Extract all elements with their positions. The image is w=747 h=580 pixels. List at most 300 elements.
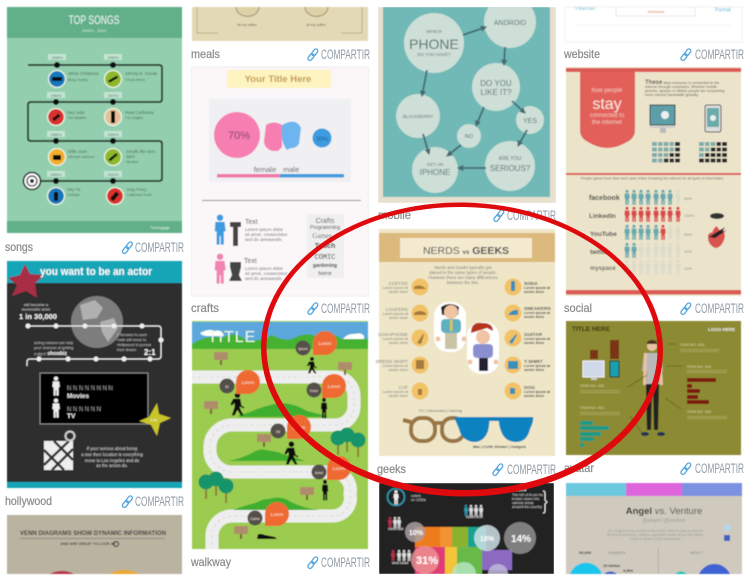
word cloud: Games [312,232,332,240]
bubble labels: 10% [409,530,424,537]
share: hollywood [122,494,184,509]
caption: People spend more time each year online browsing the internet for all types of information [581,176,723,180]
panel: female and male: male [283,165,299,174]
hills [228,403,327,510]
callout text: Lorem [319,341,332,346]
stat: 1 in 30,000: will become a [24,302,49,307]
share: crafts [307,301,370,316]
share: mobile [493,208,556,223]
card: website: Y-BarGain [575,6,596,11]
figures [230,357,328,539]
person ring [388,488,404,506]
card: meals: sit my coffee [306,23,326,27]
bubbles [570,548,730,574]
brown glasses [403,418,464,441]
flow text: PHONE [409,36,459,52]
detail lines [580,349,727,419]
pink figure row [215,253,288,284]
intro text [645,80,725,97]
card: venn diagrams [7,515,182,574]
empty pictograms [624,190,681,275]
ribbon [580,72,635,148]
card: crafts [192,67,368,296]
card: top songs: *Venngage [150,225,171,230]
yellow star: Los [151,417,157,422]
year tags: 1940's [51,56,63,60]
song titles: Chuck Berry [125,78,145,82]
card: angel vs venture: @angel | @venture [642,518,686,524]
left labels: COFFEE [389,281,408,287]
brand names [589,195,620,272]
ribbon: stay [592,96,622,113]
year tags: 2000's [50,173,62,177]
card: meals: sit my coffee [237,23,257,27]
region labels: west coast [391,561,409,565]
share: songs [122,240,184,255]
label: mobile: mobile [378,208,411,222]
title: top songs: TOP SONGS [68,13,120,27]
left labels: Lorem ipsum at [383,364,408,368]
card: venn diagrams: AND ARE GREAT TO LOOK AT [60,542,116,546]
card: dark map infographic [379,483,554,574]
intro text: These days everyone is connected to the [645,80,719,86]
flow text: ANDROID [494,20,526,27]
text: acting classes: a gig in showbiz [34,351,68,357]
callout text: Amet [315,471,323,475]
pink figure row: sit amet, consectetur [245,271,288,276]
people icons [388,505,483,561]
dotted connector [26,324,164,366]
brand names: twitter [590,249,610,256]
intro text [428,265,498,285]
song titles: The Beatles [67,116,86,120]
flow text [403,20,537,177]
state text: states [512,487,527,493]
card: mobile flowchart [378,0,556,203]
glasses captions: Mac | Coffe Drinker | Gadgets [473,445,526,449]
flow text: NO [465,134,474,140]
flow text: SERIOUS? [490,164,531,173]
left labels: sector dolor [389,290,409,294]
pink figure row: Text [244,258,257,265]
percentages: 80% [684,196,692,201]
left labels: Lorem ipsum at [383,337,408,341]
stacked bars [590,340,619,359]
year tags: 1960's [50,94,62,98]
stat: 2:1: 2 females to each [117,333,147,337]
nerd character [434,302,466,352]
bubble labels: 18% [480,536,495,543]
glasses captions [419,409,526,449]
right labels: T-SHIRT [524,359,543,365]
card: social [566,67,741,296]
song titles: Hey Jude [67,110,85,115]
year tags [47,54,122,177]
flow text: ARE YOU [499,156,522,162]
label: meals: meals [191,47,220,61]
word cloud: Programming [310,225,340,231]
callouts: orange [236,331,351,526]
right labels: SODA [524,281,538,287]
callout text: Et [225,385,229,389]
song icon glyphs [52,76,119,201]
song titles: Bing Crosby [68,78,88,82]
text: location [81,446,143,468]
text: location: move to Los Angeles and do [85,458,140,463]
left labels: SAXAPHONE [378,332,408,338]
card: meals [192,7,368,41]
black box: movies and tv: Movies [67,393,89,400]
label: avatar: avatar [564,461,594,475]
teal bar chart [580,421,609,447]
panel: female and male: 30% [316,137,329,143]
stat values: 4,000 [623,568,634,573]
label: crafts: crafts [191,301,219,315]
song titles: Johnny B. Goode [125,71,158,76]
right labels: SNEAKERS [524,306,551,312]
intro text: between the two. [447,280,479,285]
card: hollywood [7,261,182,488]
sky [192,322,368,346]
geek character [467,322,499,374]
text: location: a star then location is everything [81,452,143,457]
clouds [200,330,364,339]
region labels [388,515,484,565]
map icon [44,432,74,470]
card: website [565,6,742,42]
map blocks [415,527,512,574]
word cloud: Touch [315,243,335,250]
share: songs: COMPARTIR [135,240,184,255]
phone [705,105,721,132]
song titles: Smells like teen [126,149,156,154]
bubbles [405,522,536,574]
bubble labels [409,530,531,567]
label: social: social [564,301,592,315]
right labels: Lorem ipsum at [524,364,551,368]
item labels: ITEM NO. 003 [680,343,704,347]
intro text: phones, laptops or tablets people are consuming [645,89,725,93]
callout text: Lorem [271,512,284,517]
state text: various areas [512,501,534,505]
right labels: sector dolor [524,341,545,345]
stat values [579,550,634,573]
left labels: Lorem ipsum at [383,286,408,290]
blue figure row: Lorem ipsum dolor [245,227,284,232]
song icons [48,70,124,204]
song titles: White Christmas [68,71,99,76]
card: website: Disclosed [648,10,664,14]
title text: TITLE [208,329,256,346]
state text: around the country [512,505,542,509]
blue figure row [215,214,288,246]
share: walkway [307,555,370,570]
left labels: sector dolor [389,368,409,372]
song titles: Nirvana [126,160,138,164]
pictogram bars [624,190,673,258]
flow text: BLACKBERRY [403,114,433,119]
callout text: Lorem [328,384,341,389]
blue figure row: sed do amusando. [245,237,283,242]
item labels: ITEM NO. 002 [580,384,604,388]
right labels: sector dolor [524,290,545,294]
person figure [641,340,665,436]
blue figure row: sit amet, consectetur [245,232,288,237]
card: top songs: 1940's - 2010 [82,28,107,33]
flow text: IPHONE [420,168,450,177]
right labels: Lorem ipsum at [524,311,551,315]
song titles: spirit [126,154,136,159]
dot grids [652,142,727,163]
intro text [607,529,703,541]
red highlight ellipse [258,199,666,500]
label: geeks: geeks [377,462,406,476]
left labels [376,281,409,398]
item labels [580,343,711,414]
state text: The US of A can be [512,493,543,497]
panel: female and male: 70% [228,130,250,142]
timeline nodes [53,62,116,184]
stat: 2:1: 2:1 [144,348,156,357]
text: acting classes: your chances of getting [34,346,73,350]
flow text: WHICH [426,29,442,34]
callout text: Lorem [242,380,255,385]
share: meals [307,47,370,62]
device icons [583,361,619,380]
panel: female and male: female [254,165,276,174]
bubble labels: 14% [511,534,531,545]
bubble labels: 31% [416,555,438,567]
stat values: 50,000 [579,550,592,555]
card: nerds vs geeks [376,229,555,456]
heading: actor: you want to be an actor [40,266,153,278]
stat: 2:1: Hollywood to pursue [117,343,151,347]
title: LOGO HERE [708,327,735,332]
ribbon: the internet [592,120,622,126]
text: acting classes: acting classes can help [34,341,73,345]
stat: 1 in 30,000 [19,302,57,321]
percentages: 100% [684,213,695,218]
ribbon: connected to [590,113,625,119]
right labels: GUITAR [524,332,543,338]
right labels: DOG [524,385,535,391]
left labels: Lorem ipsum at [383,390,408,394]
right labels: sector dolor [524,368,545,372]
state text: voters [411,494,421,498]
right labels [524,281,551,398]
stat: 1 in 30,000: successful actor [22,306,51,312]
black box: movies and tv: NNNNNN [67,407,103,413]
word cloud: horror [318,271,332,277]
card: walkway [192,321,368,549]
flow text: YES [523,118,537,125]
left labels: CAT [399,385,408,391]
year tags: 1950's [107,56,119,60]
pink figure row: Lorem ipsum dolor [245,266,284,271]
stat: 2:1: male will move to [117,338,146,342]
text: acting classes [34,341,73,357]
title: TITLE HERE [572,326,611,333]
flow arrows [422,27,527,168]
icon glyphs [414,281,518,395]
header band: NERDS vs GEEKS [423,245,509,257]
right labels: sector dolor [524,394,545,398]
label: songs: songs [5,240,33,254]
word cloud: gardening [313,263,337,269]
state text: broken down into [512,497,539,501]
right labels: Lorem ipsum at [524,390,551,394]
percentages [684,196,695,271]
card: top songs [7,7,182,233]
right labels: Lorem ipsum at [524,286,551,290]
brand names: facebook [589,195,620,202]
callout text: Lorem [293,425,306,430]
song titles: California Gurls [127,193,152,197]
intro text: more internet bandwidth globally. [645,93,699,97]
share: crafts: COMPARTIR [321,301,370,316]
title: angel vs venture: Angel vs. Venture [626,506,702,517]
stat labels: IMPACT [690,551,704,555]
intro text: a year in about 3,500 businesses [629,537,681,541]
left labels: Lorem ipsum at [383,312,408,316]
callout text: Sit [276,430,280,434]
title [572,326,735,333]
stat: 2:1: their dream [117,348,136,352]
song titles: Outkast [67,193,79,197]
year tags: 1980's [50,133,62,137]
intro text: internet through computers. Whether mobile [645,85,717,89]
song titles: Hey Ya [67,187,81,192]
brand names: YouTube [590,231,617,238]
song titles [67,71,158,197]
brand names: LinkedIn [589,213,616,220]
song titles: Billie Jean [68,149,88,154]
signposts [204,352,352,539]
flow text: GET AN [427,162,443,167]
ribbon: how people [592,88,623,94]
year tags: 1970's [107,94,119,98]
right labels: sector dolor [524,315,545,319]
icon circles [412,278,522,400]
header band [379,233,555,262]
intro text: placed in the same types of people. [429,270,497,275]
share: mobile: COMPARTIR [507,208,556,223]
stat labels: NUMBERS [608,551,626,555]
region labels: north east [388,527,404,531]
item labels: ITEM NO. 005 [687,410,711,414]
callouts: grey [220,340,326,526]
red pictograms [624,207,681,240]
brand names: myspace [590,266,616,272]
left labels: DRESS SHIRT [376,359,408,365]
road [192,377,354,549]
timeline path [28,65,162,181]
trees [198,428,366,503]
share: geeks [492,462,556,477]
callout text: Dolor [310,389,319,393]
text: location: as the actors do. [96,463,128,468]
state text: on 1930s [411,498,426,502]
share: hollywood: COMPARTIR [135,494,184,509]
fire icon [708,213,727,248]
left labels: sector dolor [389,316,409,320]
stat: 1 in 30,000: 1 in 30,000 [19,312,57,321]
song titles: Michael Jackson [68,155,95,159]
left labels: sector dolor [389,341,409,345]
stat values: 20 billion [603,563,621,568]
share: walkway: COMPARTIR [321,555,370,570]
yellow star [139,403,171,436]
callout text: Lorem [333,466,346,471]
item labels: ITEM NO. 001 [580,406,604,410]
flow text: DO YOU HAVE? [417,52,451,57]
share: meals: COMPARTIR [321,47,370,62]
legend [724,525,730,541]
song titles: Katy Perry [127,187,147,192]
stat: 2:1 [117,333,156,357]
card: angel vs venture [566,483,742,574]
target icon [24,172,40,190]
percentages: 20% [684,249,692,254]
intro text: ALL Angels invest a total of about $20 billion a year in around [608,529,702,533]
monitor [650,105,675,133]
word cloud: COMIC [314,254,336,262]
divider line [202,199,361,202]
region labels: south west [466,515,484,519]
song titles: The Eagles [125,116,143,120]
blue figure row: Text [245,219,258,226]
pink figure row: sed do amusando. [245,276,283,281]
bracket [543,491,547,513]
percentages: 10% [684,266,692,271]
glasses captions: PC | Introverted | Gaming [419,409,462,413]
stat labels [608,551,704,555]
red bar chart [687,378,716,404]
label: walkway: walkway [190,555,231,569]
title: your title here [227,70,331,88]
label: hollywood: hollywood [5,494,52,508]
label: website: website [563,47,600,61]
share: geeks: COMPARTIR [507,462,556,477]
percentages: 55% [684,232,692,237]
blue glasses [454,417,533,442]
card: avatar [566,321,741,455]
black box: movies and tv [40,373,148,424]
flow text: LIKE IT? [480,88,512,97]
red star [8,264,45,298]
word cloud: Crafts [316,218,335,225]
callout text [225,341,346,521]
card: venn diagrams: VENN DIAGRAMS SHOW DYNAMIC INFORMATION [20,530,166,537]
title: your title here: Your Title Here [245,74,311,85]
item labels: ITEM NO. 004 [687,365,711,369]
year tags: 1990's [107,133,119,137]
intro text: 50,000 businesses. Venture capitalists invest about $20 billion [607,533,703,537]
globe [71,296,123,348]
year tags: 2010's [107,173,119,177]
black box: movies and tv: NNNNNNNN [67,386,114,392]
state text [411,487,543,509]
word cloud [307,214,344,278]
text: location: if your serious about being [87,446,138,451]
flow circles [396,0,544,193]
card: website: Portrait [715,8,732,14]
song titles: Hotel California [125,110,154,115]
flow text: DO YOU [480,79,512,88]
intro text: However there are many differences [428,275,498,280]
intro text: Nerds and Geeks typically get [434,265,492,270]
right labels: Lorem ipsum at [524,337,551,341]
